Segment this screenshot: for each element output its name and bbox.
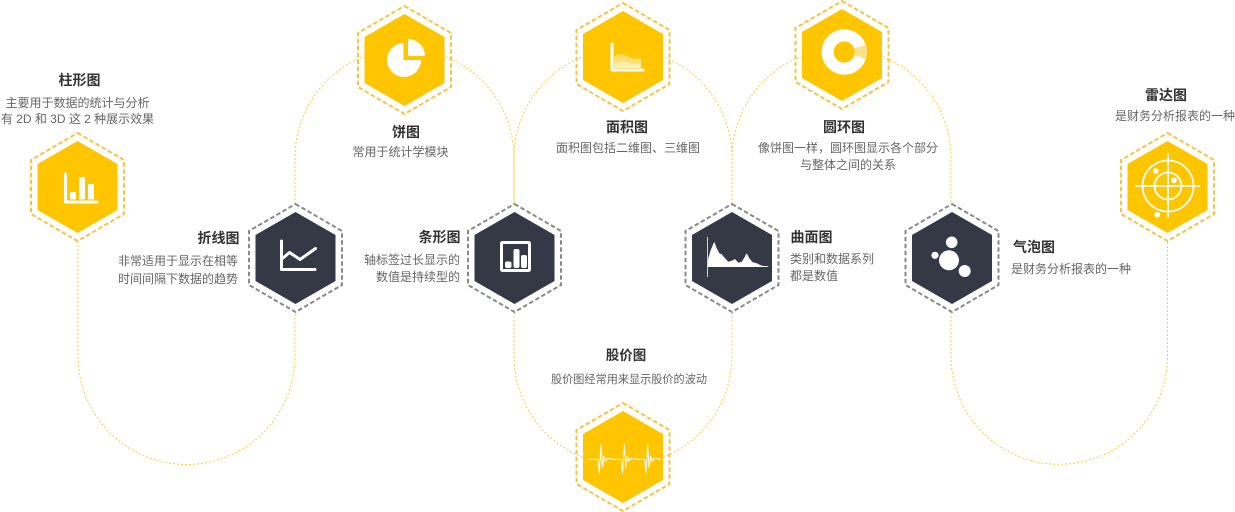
icon: area on axis [612,44,643,70]
description: doughnut chart: 与整体之间的关系 [800,157,896,172]
title: pie chart: 饼图 [392,124,420,140]
icon: pie [387,39,425,77]
hexagon: surface chart [686,204,778,312]
title: horizontal bar chart: 条形图 [418,229,460,245]
description: doughnut chart: 像饼图一样，圆环图显示各个部分 [758,140,938,155]
icon: radar [1135,153,1200,218]
panel: stock chart [551,348,707,511]
description: area chart: 面积图包括二维图、三维图 [556,140,700,155]
icon: bubbles [931,236,971,277]
description: radar chart: 是财务分析报表的一种 [1115,108,1235,123]
description: bar chart: 有 2D 和 3D 这 2 种展示效果 [1,111,154,126]
title: doughnut chart: 圆环图 [823,119,865,135]
icon: line on axis [282,241,316,270]
hexagon: stock chart [576,403,670,511]
title: radar chart: 雷达图 [1145,87,1187,103]
panel: horizontal bar chart [364,204,561,312]
description: pie chart: 常用于统计学模块 [352,144,449,159]
panel: line chart [118,204,342,312]
description: bar chart: 主要用于数据的统计与分析 [5,95,150,110]
description: surface chart: 都是数值 [790,268,838,283]
title: bubble chart: 气泡图 [1013,239,1055,255]
description: line chart: 时间间隔下数据的趋势 [118,271,238,286]
hexagon: radar chart [1121,133,1214,241]
hexagon: pie chart [358,6,451,114]
title: line chart: 折线图 [198,230,240,246]
title: surface chart: 曲面图 [790,229,832,245]
hexagon: doughnut chart [796,1,888,109]
description: line chart: 非常适用于显示在相等 [118,254,238,268]
description: horizontal bar chart: 轴标签过长显示的 [364,252,460,267]
title: stock chart: 股价图 [606,348,646,363]
hexagon: horizontal bar chart [468,204,561,312]
panel: bar chart [1,72,154,241]
panel: radar chart [1115,87,1235,241]
panel: area chart [556,3,700,155]
description: surface chart: 类别和数据系列 [790,251,874,266]
description: bubble chart: 是财务分析报表的一种 [1011,261,1131,276]
hexagon: area chart [576,3,670,111]
title: bar chart: 柱形图 [58,72,100,88]
panel: doughnut chart [758,1,938,172]
icon: bars on axis [66,174,97,202]
panel: bubble chart [906,204,1131,312]
icon: surface silhouette [708,237,768,277]
icon: pulse line [588,445,661,473]
hexagon: line chart [249,204,342,312]
title: area chart: 面积图 [606,119,648,135]
panel: pie chart [352,6,451,159]
description: stock chart: 股价图经常用来显示股价的波动 [551,372,707,386]
icon: framed bars [502,242,530,270]
connecting dotted path [78,49,1168,465]
panel: surface chart [686,204,874,312]
hexagon: bar chart [31,133,124,241]
hexagon: bubble chart [906,204,998,312]
description: horizontal bar chart: 数值是持续型的 [376,269,460,284]
icon: doughnut [828,35,867,69]
